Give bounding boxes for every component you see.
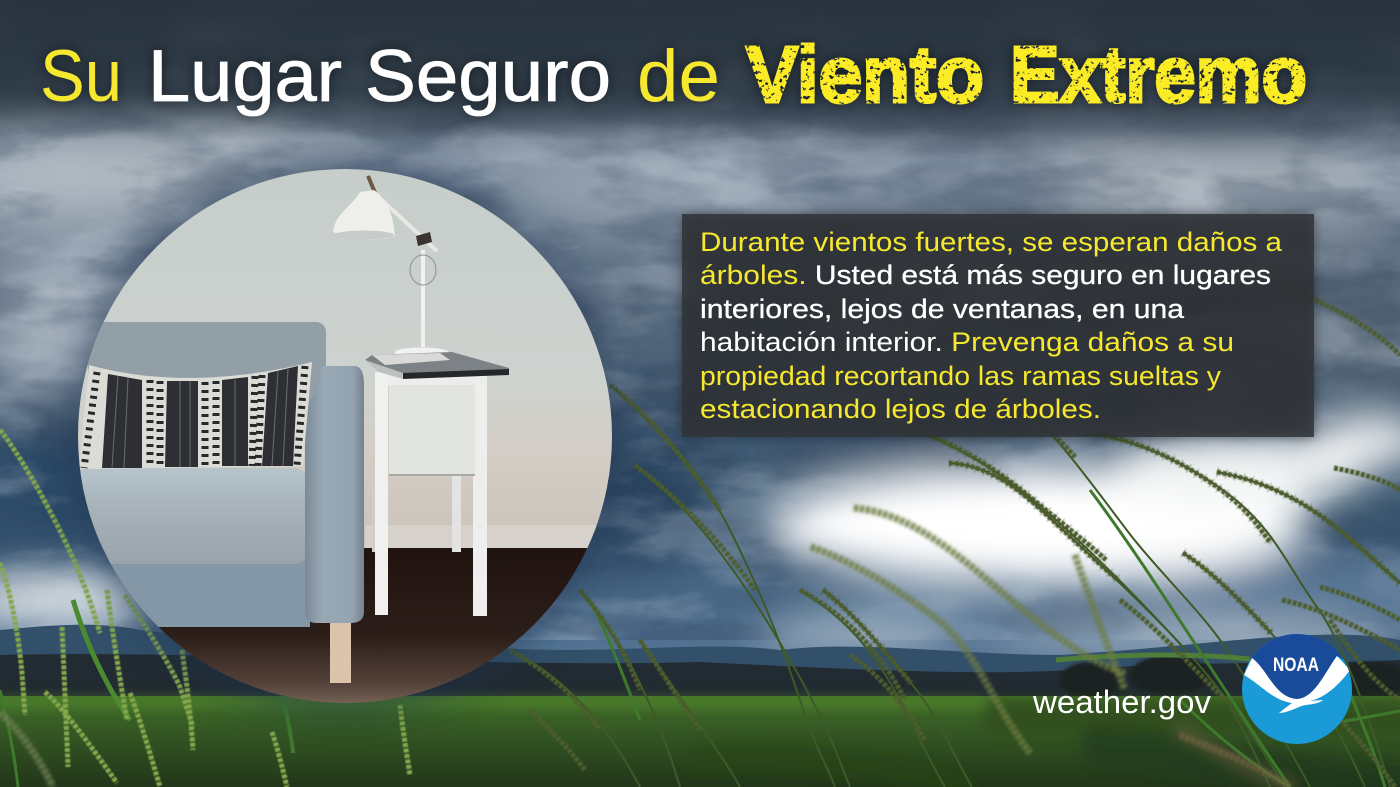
panel body text: estacionando lejos de árboles. bbox=[700, 394, 1101, 424]
grass: stems right bbox=[510, 385, 1400, 787]
icon: NOAA logo: NOAA bbox=[1273, 655, 1319, 676]
title: Viento Extremo: Extremo bbox=[1010, 30, 1307, 119]
title: Viento Extremo bbox=[746, 30, 1307, 119]
title: Su Lugar Seguro de: Su bbox=[40, 36, 122, 117]
panel body text: propiedad recortando las ramas sueltas y bbox=[700, 361, 1222, 391]
grass: spikelet hairs right bbox=[823, 423, 1400, 683]
grass: blurred seed heads right bbox=[0, 508, 1290, 787]
title: Su Lugar Seguro de: Seguro bbox=[365, 36, 611, 117]
text panel bbox=[682, 214, 1314, 437]
grass stalks bbox=[0, 285, 1400, 787]
baseboard bbox=[365, 525, 615, 549]
title: Su Lugar Seguro de: Lugar bbox=[148, 36, 342, 117]
photo circle shadow bbox=[73, 164, 617, 708]
title: Su Lugar Seguro de: de bbox=[637, 36, 720, 117]
sofa: seat cushion bbox=[72, 468, 310, 564]
grass: seed heads left bbox=[0, 430, 410, 787]
panel body text: árboles. Usted está más seguro en lugares bbox=[700, 260, 1271, 290]
wall bbox=[70, 165, 620, 550]
panel body text: Durante vientos fuertes, se esperan daños a bbox=[700, 227, 1283, 257]
title: Su Lugar Seguro de bbox=[40, 36, 720, 117]
sofa: legs bbox=[330, 620, 351, 683]
floor bbox=[102, 548, 588, 703]
photo: living room with sofa and lamp bbox=[70, 165, 620, 708]
book on table bbox=[365, 352, 509, 379]
side table bbox=[372, 372, 487, 616]
panel background bbox=[682, 214, 1314, 437]
panel body text: habitación interior. Prevenga daños a su bbox=[700, 327, 1234, 357]
background: mountains and field bbox=[0, 625, 1400, 787]
sofa: armrest bbox=[305, 366, 364, 623]
sofa: striped pillow bbox=[79, 362, 312, 469]
title: Viento Extremo: Viento bbox=[746, 30, 984, 119]
grass: seed heads right bbox=[510, 285, 1400, 787]
sofa: base bbox=[100, 556, 310, 627]
grass: green blades bbox=[0, 490, 1400, 787]
table lamp bbox=[333, 176, 449, 358]
panel body text bbox=[700, 227, 1283, 424]
sofa: back cushion bbox=[88, 322, 326, 406]
panel body text: interiores, lejos de ventanas, en una bbox=[700, 294, 1185, 324]
title bbox=[40, 30, 1307, 119]
website label: weather.gov bbox=[1032, 684, 1211, 720]
icon: NOAA logo bbox=[1240, 634, 1354, 744]
